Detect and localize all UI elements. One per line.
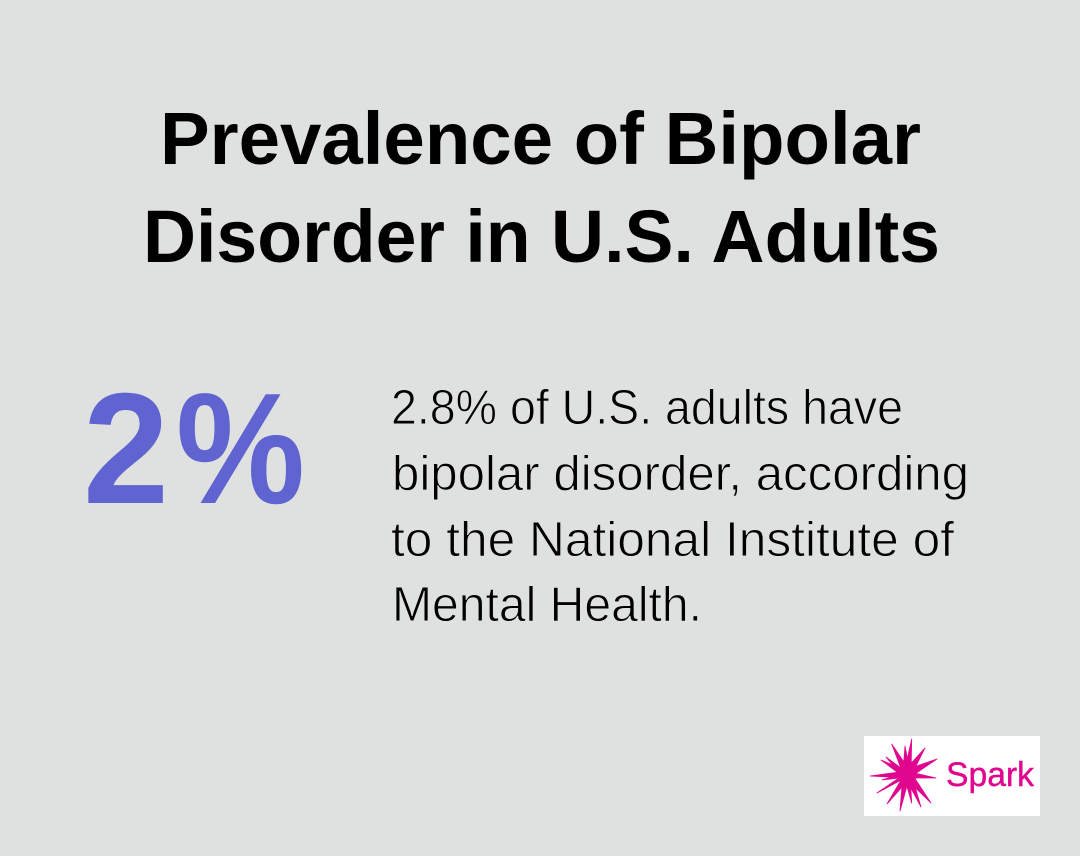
title: [143, 97, 940, 278]
description text: to the National Institute of: [391, 512, 954, 567]
big statistic: 2%: [83, 361, 305, 537]
logo: Spark: [864, 736, 1040, 816]
icon: starburst: [870, 739, 937, 811]
description text: bipolar disorder, according: [392, 446, 969, 501]
description text: 2.8% of U.S. adults have: [391, 380, 903, 435]
logo wordmark: Spark: [946, 756, 1035, 794]
title: Disorder in U.S. Adults: [143, 195, 940, 278]
title: Prevalence of Bipolar: [160, 97, 921, 180]
description text: Mental Health.: [392, 577, 702, 632]
description text: [391, 380, 969, 632]
big statistic: 2%: 2: [83, 361, 169, 537]
big statistic: 2%: %: [176, 361, 305, 537]
